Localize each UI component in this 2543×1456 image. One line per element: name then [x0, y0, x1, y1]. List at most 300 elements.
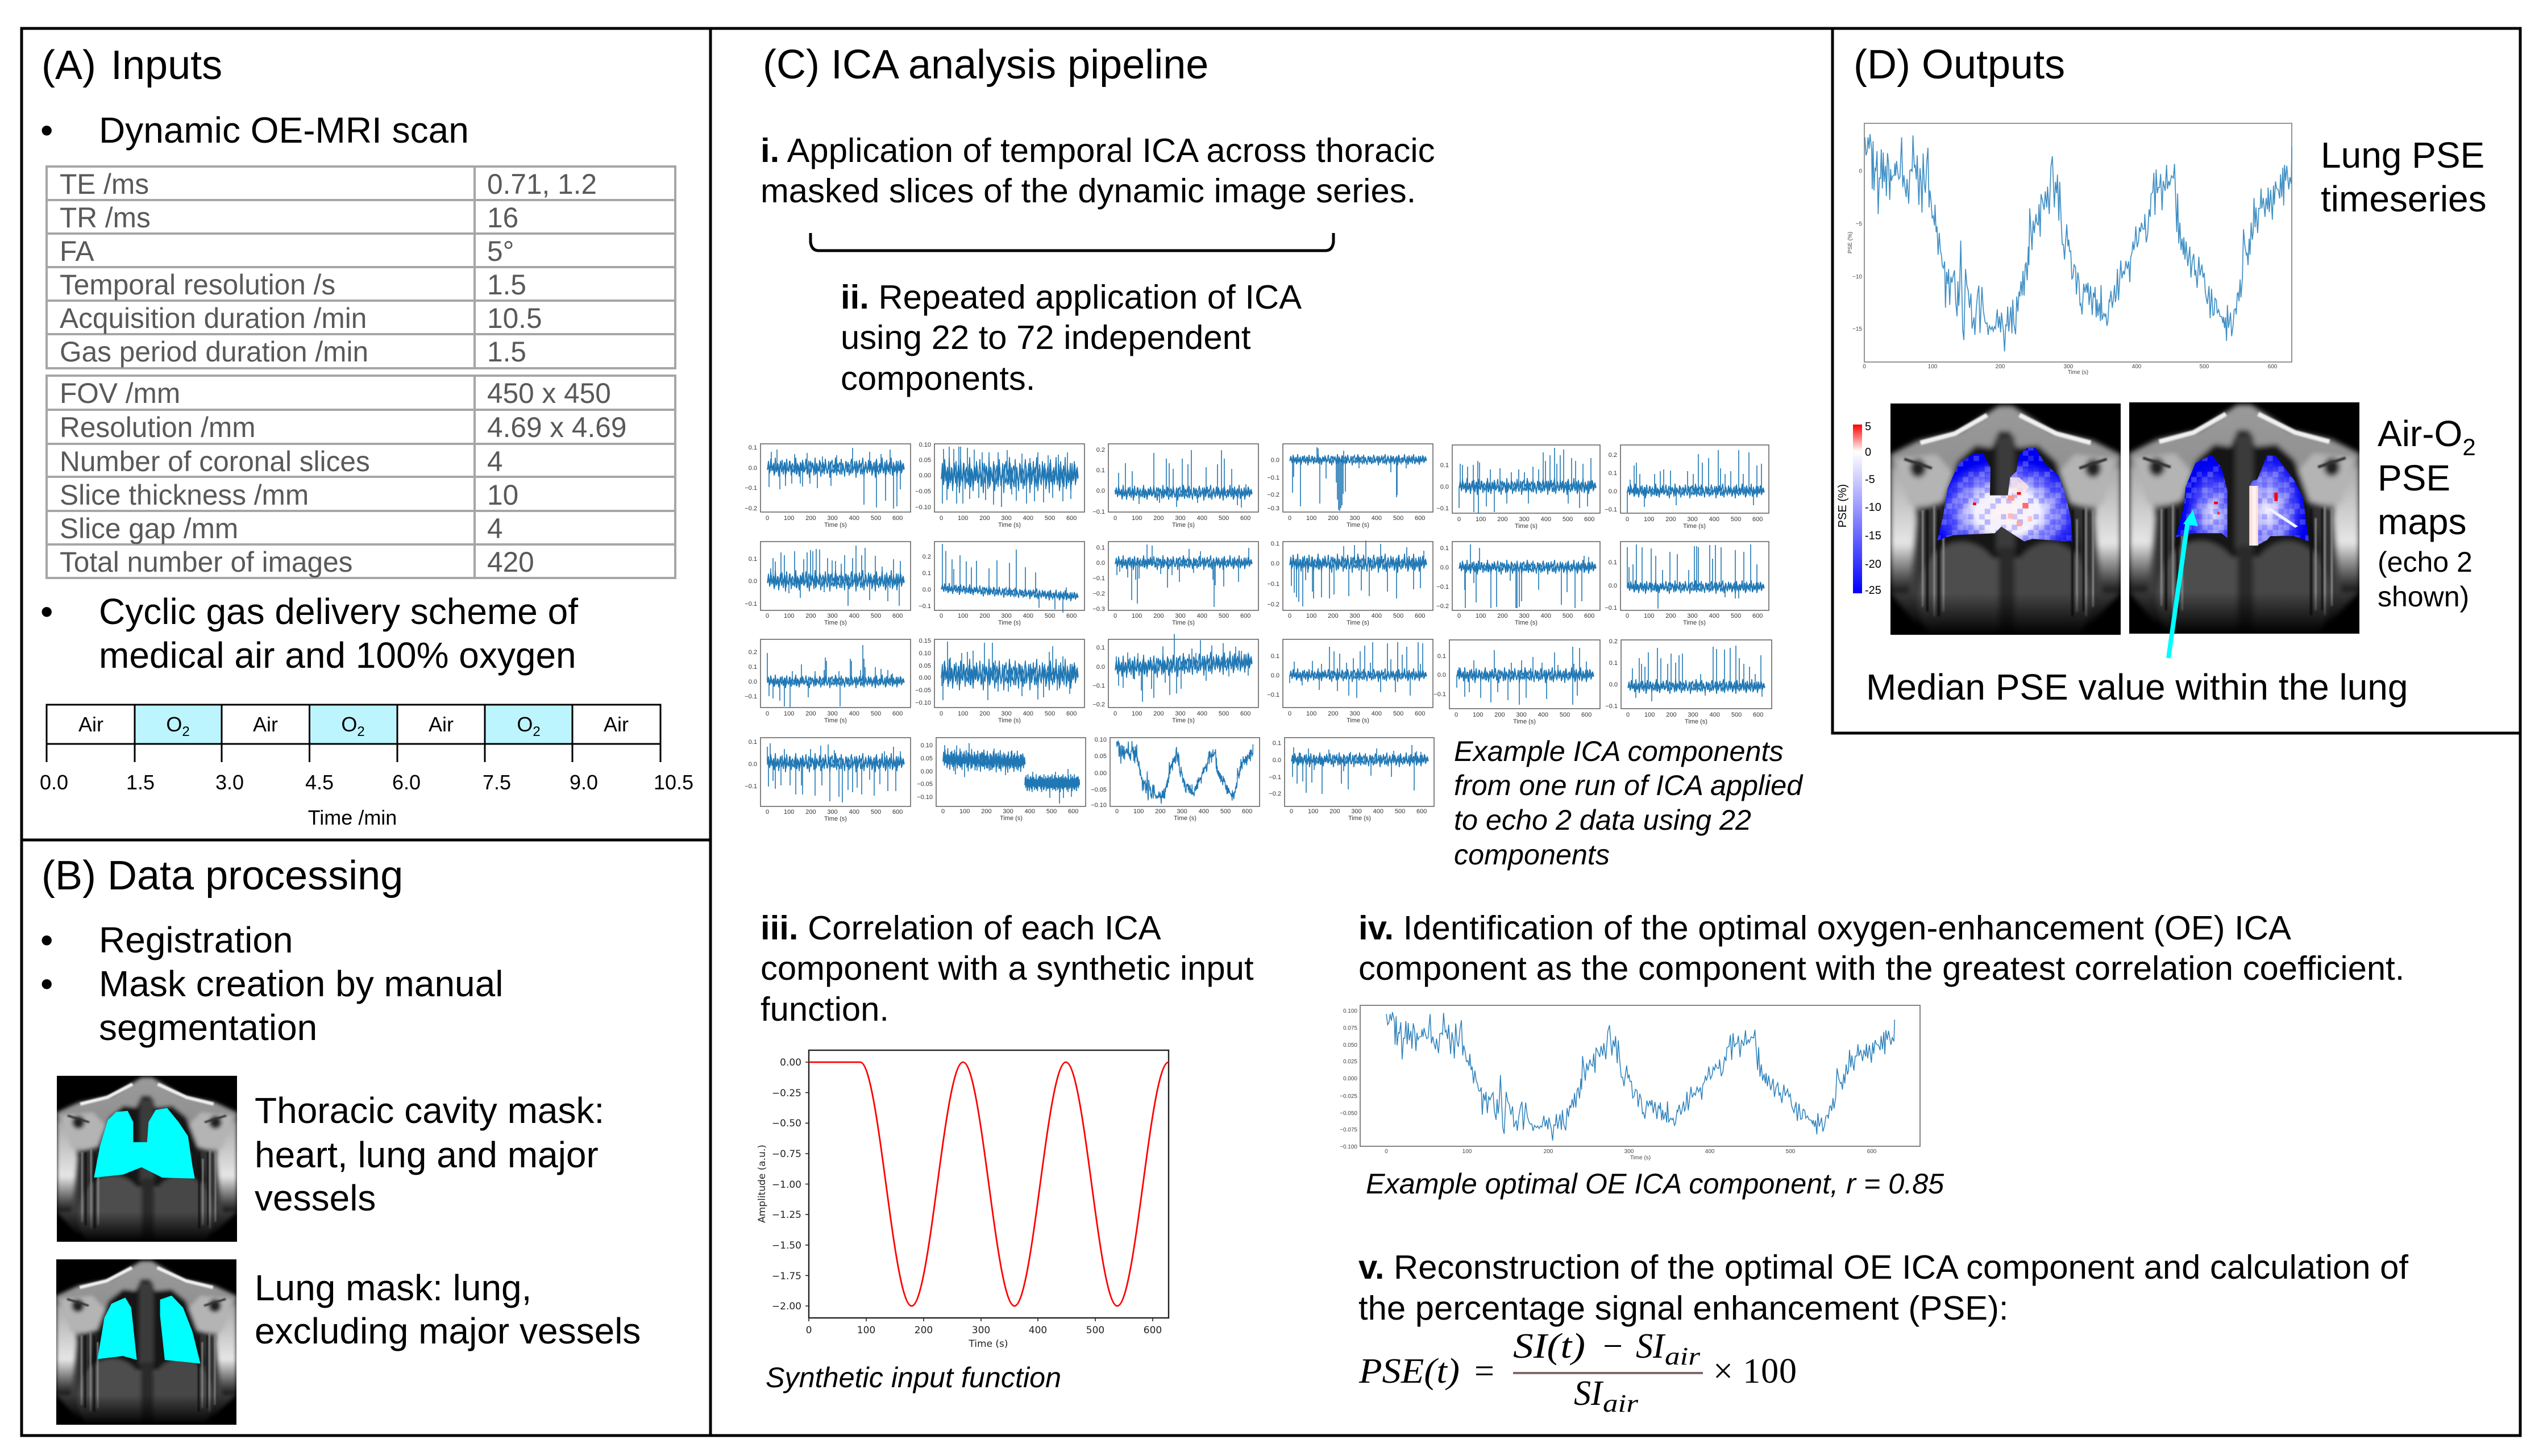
plot r2c5: 100 200 300 400 500 600 — [1476, 613, 1594, 619]
bullet: dynamic scan: Dynamic OE-MRI scan — [99, 110, 469, 151]
plot r4c3: cyclic component: 0.10 — [1095, 737, 1107, 743]
table: acquisition parameters: 10 — [487, 479, 518, 511]
bullets: registration and mask creation: • — [40, 963, 53, 1004]
table: acquisition parameters: TE /ms — [60, 168, 149, 200]
plot r2c5: 0.0 — [1440, 564, 1449, 571]
plot r2c5: 0 — [1457, 613, 1461, 619]
formula: PSE: SI(t) — [1513, 1327, 1585, 1366]
table: acquisition parameters — [47, 167, 675, 578]
plot r1c2: 0 — [940, 515, 943, 522]
table: acquisition parameters: FOV /mm — [60, 377, 180, 409]
plot r3c2: 0 — [940, 710, 943, 717]
chart: optimal OE ICA component: 400 — [1705, 1149, 1715, 1155]
caption: example ICA components: from one run of ICA applied — [1454, 769, 1804, 801]
table: acquisition parameters: Slice thickness /mm — [60, 479, 309, 511]
plot r1c2: 0.10 — [919, 442, 931, 448]
chart: synthetic input function: 300 — [972, 1325, 990, 1336]
bullets: registration and mask creation: Mask creation by manual — [99, 963, 503, 1004]
heading D: (D) Outputs — [1854, 42, 2065, 88]
plot r2c2: 100 200 300 400 500 600 — [958, 613, 1077, 619]
chart: lung PSE timeseries: 300 — [2064, 364, 2074, 370]
colour bar: PSE (%) — [1836, 484, 1849, 527]
plot r2c5: −0.1 — [1436, 584, 1449, 590]
plot r2c3: Time (s) — [1172, 619, 1195, 626]
step v: the percentage signal enhancement (PSE): — [1358, 1289, 2009, 1327]
bullets: registration and mask creation: • — [40, 920, 53, 960]
plot r3c6: 100 200 300 400 500 600 — [1644, 712, 1763, 718]
panel A: inputs — [40, 43, 693, 829]
plot r4c4: 100 200 300 400 500 600 — [1308, 808, 1427, 815]
plot r4c3: cyclic component: −0.10 — [1091, 802, 1107, 809]
bullets: registration and mask creation: segmentation — [99, 1007, 317, 1048]
colour bar: -25 — [1865, 584, 1881, 597]
step iv: component as the component with the greatest correlation coefficient. — [1358, 949, 2404, 987]
plot r3c3: Time (s) — [1172, 717, 1195, 724]
formula: PSE: SI — [1574, 1374, 1604, 1413]
plot r2c1 — [745, 542, 911, 626]
table: acquisition parameters: FA — [60, 235, 94, 267]
plot r1c2 — [915, 442, 1084, 529]
plot r2c1: Time (s) — [824, 619, 847, 626]
plot r1c6: 0.1 — [1609, 470, 1617, 477]
caption: example ICA components: components — [1454, 838, 1610, 871]
chart: lung PSE timeseries: PSE (%) — [1847, 232, 1854, 253]
plot r2c4 — [1267, 540, 1433, 626]
plot r4c4: 0.0 — [1273, 757, 1281, 764]
table: acquisition parameters: 5° — [487, 235, 514, 267]
plot r3c1: Time (s) — [824, 717, 847, 724]
plot r2c4: Time (s) — [1347, 619, 1369, 626]
plot r3c6: −0.1 — [1605, 703, 1618, 710]
plot r3c1: 0.0 — [749, 679, 757, 685]
plot r2c4: 0.1 — [1271, 540, 1279, 547]
chart: optimal OE ICA component: 0.000 — [1343, 1076, 1357, 1082]
plot r3c1: 100 200 300 400 500 600 — [784, 710, 903, 717]
formula: PSE — [1358, 1327, 1797, 1417]
chart: lung PSE timeseries: 500 — [2200, 364, 2209, 370]
chart: synthetic input function: Time (s) — [968, 1338, 1008, 1350]
plot r1c4: 100 200 300 400 500 600 — [1306, 515, 1425, 522]
plot r2c5: 0.1 — [1440, 545, 1449, 552]
chart: optimal OE ICA component: 0.100 — [1343, 1008, 1357, 1014]
plot r2c1: 0.1 — [749, 556, 757, 563]
plot r3c6: 0.2 — [1609, 638, 1618, 645]
plot r2c5: −0.2 — [1436, 603, 1449, 610]
table: acquisition parameters: 4.69 x 4.69 — [487, 411, 626, 443]
plot r2c3: −0.3 — [1092, 606, 1105, 613]
colour bar: 0 — [1865, 446, 1871, 459]
chart: synthetic input function: −1.25 — [772, 1209, 801, 1221]
formula: PSE: × 100 — [1713, 1352, 1797, 1391]
chart: synthetic input function — [757, 1050, 1169, 1350]
table: acquisition parameters: 420 — [487, 546, 534, 578]
chart: optimal OE ICA component: 500 — [1786, 1149, 1796, 1155]
bullet: gas delivery: medical air and 100% oxygen — [99, 635, 576, 676]
plot r1c5: −0.1 — [1436, 505, 1449, 512]
gas delivery timeline: 3.0 — [215, 771, 244, 794]
gas delivery timeline: 10.5 — [654, 771, 693, 794]
gas delivery timeline: 4.5 — [305, 771, 334, 794]
plot r4c3: cyclic component: 100 200 300 400 500 600 — [1133, 808, 1252, 815]
formula: PSE: air — [1603, 1390, 1639, 1417]
plot r1c2: −0.05 — [915, 488, 931, 495]
plot r4c1: 0.1 — [749, 739, 757, 746]
chart: optimal OE ICA component: −0.075 — [1340, 1127, 1357, 1133]
plot r1c4: −0.1 — [1267, 475, 1279, 481]
plot r1c1: −0.1 — [745, 485, 757, 492]
colour bar: 5 — [1865, 421, 1871, 433]
plot r1c6: 100 200 300 400 500 600 — [1644, 516, 1763, 523]
plot r2c4: 100 200 300 400 500 600 — [1306, 613, 1425, 619]
plot r2c6 — [1605, 542, 1769, 626]
plot r4c1: 0.0 — [749, 761, 757, 768]
plot r3c4 — [1267, 639, 1433, 724]
chart: optimal OE ICA component: 200 — [1544, 1149, 1553, 1155]
plot r4c1: Time (s) — [824, 816, 847, 822]
gas delivery timeline: O — [166, 713, 182, 736]
plot r4c4: 0 — [1290, 808, 1293, 815]
colour bar: -10 — [1865, 501, 1881, 514]
gas delivery timeline: Air — [78, 713, 103, 736]
plot r3c3: 0.0 — [1096, 664, 1105, 671]
chart: optimal OE ICA component: −0.050 — [1340, 1110, 1357, 1117]
chart: synthetic input function: −0.75 — [772, 1149, 801, 1160]
plot r4c2: 100 200 300 400 500 600 — [959, 808, 1078, 815]
table: acquisition parameters: 1.5 — [487, 336, 526, 368]
label: air-O2 PSE maps: PSE — [2378, 457, 2450, 498]
chart: optimal OE ICA component: 0.050 — [1343, 1042, 1357, 1049]
plot r2c6: 0.1 — [1609, 559, 1617, 566]
heading A: (A) — [41, 43, 96, 88]
plot r3c1: 0.1 — [749, 664, 757, 671]
chart: lung PSE timeseries: 200 — [1996, 364, 2005, 370]
plot r2c4: 0 — [1288, 613, 1291, 619]
plot r2c3: −0.1 — [1092, 575, 1105, 582]
label: air-O2 PSE maps: maps — [2378, 501, 2467, 542]
table: acquisition parameters: Acquisition duration /min — [60, 302, 367, 334]
plot r2c6: 100 200 300 400 500 600 — [1644, 613, 1763, 619]
plot r1c5: 0.1 — [1440, 462, 1449, 469]
chart: synthetic input function: −1.00 — [772, 1179, 801, 1191]
step ii: using 22 to 72 independent — [841, 318, 1251, 356]
gas delivery timeline: 7.5 — [483, 771, 511, 794]
chart: lung PSE timeseries: Time (s) — [2068, 369, 2088, 376]
plot r2c2: −0.1 — [919, 603, 931, 610]
plot r3c3: −0.1 — [1092, 683, 1105, 689]
plot r4c1: −0.1 — [745, 783, 757, 790]
plot r1c5: 0 — [1457, 516, 1461, 523]
plot r2c5 — [1436, 542, 1600, 626]
plot r4c2: Time (s) — [1000, 815, 1023, 822]
plot r3c1 — [745, 639, 911, 724]
plot r1c2: 100 200 300 400 500 600 — [958, 515, 1077, 522]
chart: synthetic input function: −0.25 — [772, 1088, 801, 1099]
plot r2c1: −0.1 — [745, 601, 757, 608]
plot r3c2: 0.15 — [919, 638, 931, 644]
gas delivery timeline: 1.5 — [126, 771, 155, 794]
plot r3c1: −0.1 — [745, 693, 757, 700]
label: air-O2 PSE maps: shown) — [2378, 581, 2469, 613]
plot r1c4: Time (s) — [1347, 522, 1369, 529]
chart: synthetic input function: 600 — [1144, 1325, 1162, 1336]
plot r3c4: 100 200 300 400 500 600 — [1306, 710, 1425, 717]
plot r3c4: Time (s) — [1347, 717, 1369, 724]
plot r2c2: Time (s) — [998, 619, 1021, 626]
plot r2c1: 100 200 300 400 500 600 — [784, 613, 903, 619]
gas delivery timeline: O — [517, 713, 533, 736]
chart: synthetic input function: −0.50 — [772, 1118, 801, 1129]
plot r4c2: −0.10 — [917, 794, 933, 801]
gas delivery timeline: 2 — [533, 724, 541, 739]
gas delivery timeline: O — [341, 713, 357, 736]
table: acquisition parameters: 1.5 — [487, 269, 526, 301]
plot r4c4: 0.1 — [1273, 740, 1281, 747]
chart: lung PSE timeseries: 100 — [1928, 364, 1938, 370]
plot r4c3: cyclic component — [1091, 737, 1260, 822]
plot r1c1 — [745, 444, 911, 529]
plot r1c6: 0 — [1626, 516, 1629, 523]
plot r3c1: 0.2 — [749, 649, 757, 656]
chart: optimal OE ICA component: 100 — [1462, 1149, 1472, 1155]
chart: synthetic input function: 0.00 — [780, 1057, 801, 1068]
PSE map: thoracic cavity — [1890, 403, 2121, 654]
caption: example ICA components: to echo 2 data using 22 — [1454, 804, 1751, 836]
plot r2c2: 0.0 — [923, 586, 931, 593]
chart: lung PSE timeseries — [1847, 123, 2292, 376]
table: acquisition parameters: Gas period duration /min — [60, 336, 368, 368]
plot r2c3: −0.2 — [1092, 590, 1105, 597]
chart: lung PSE timeseries: 0 — [1863, 364, 1866, 370]
plot r3c2: −0.05 — [915, 687, 931, 694]
plot r4c3: cyclic component: −0.05 — [1091, 787, 1107, 793]
plot r3c5 — [1433, 640, 1600, 725]
gas delivery timeline: 6.0 — [392, 771, 421, 794]
plot r1c3: 0 — [1113, 515, 1117, 522]
plot r2c3: 0.0 — [1096, 560, 1105, 567]
plot r3c4: −0.1 — [1267, 692, 1279, 698]
plot r1c6: −0.1 — [1605, 506, 1617, 513]
plot r1c4: 0 — [1288, 515, 1291, 522]
chart: optimal OE ICA component: −0.025 — [1340, 1093, 1357, 1100]
colour bar: -5 — [1865, 473, 1875, 486]
plot r3c2 — [915, 638, 1084, 724]
plot r1c4: −0.2 — [1267, 492, 1279, 498]
plot r1c1: Time (s) — [824, 522, 847, 529]
gas delivery timeline — [40, 705, 693, 829]
plot r4c2: −0.05 — [917, 781, 933, 788]
panel D: outputs — [1836, 42, 2487, 708]
chart: optimal OE ICA component — [1340, 1005, 1920, 1161]
plot r2c6: 0 — [1626, 613, 1629, 619]
chart: synthetic input function: 200 — [915, 1325, 933, 1336]
plot r2c2: 0.2 — [923, 554, 931, 560]
chart: synthetic input function: −1.50 — [772, 1240, 801, 1251]
step iii: iii. Correlation of each ICA — [761, 909, 1161, 947]
chart: synthetic input function: −2.00 — [772, 1301, 801, 1312]
plot r4c4: −0.2 — [1269, 791, 1281, 797]
caption: thoracic cavity mask: Thoracic cavity mask: — [255, 1090, 604, 1131]
plot r1c1: 100 200 300 400 500 600 — [784, 515, 903, 522]
plot r3c2: 0.00 — [919, 675, 931, 681]
plot r3c3 — [1092, 630, 1258, 724]
ICA component grid — [745, 442, 1772, 822]
plot r3c4: 0.1 — [1271, 653, 1279, 660]
step iv: iv. Identification of the optimal oxygen-enhancement (OE) ICA — [1358, 909, 2291, 947]
plot r4c1 — [745, 738, 911, 822]
table: acquisition parameters: 4 — [487, 513, 503, 544]
heading C: (C) ICA analysis pipeline — [763, 42, 1208, 88]
plot r3c5: 0.0 — [1437, 672, 1446, 679]
colour bar: -20 — [1865, 558, 1881, 571]
plot r3c1: 0 — [766, 710, 769, 717]
plot r3c6 — [1605, 638, 1772, 725]
plot r1c1: 0 — [766, 515, 769, 522]
step i: masked slices of the dynamic image series. — [761, 172, 1416, 210]
colour bar: -15 — [1865, 530, 1881, 542]
chart: synthetic input function: 500 — [1086, 1325, 1104, 1336]
plot r1c5: 100 200 300 400 500 600 — [1476, 516, 1594, 523]
plot r1c4 — [1267, 444, 1433, 529]
bullet: gas delivery: Cyclic gas delivery scheme of — [99, 591, 578, 632]
label: air-O2 PSE maps: (echo 2 — [2378, 546, 2473, 578]
plot r4c4: −0.1 — [1269, 774, 1281, 781]
plot r3c6: Time (s) — [1685, 718, 1707, 725]
plot r2c2: 0.1 — [923, 570, 931, 577]
gas delivery timeline: Air — [429, 713, 454, 736]
panel C: ICA analysis pipeline — [745, 42, 2408, 1417]
gas delivery timeline: 0.0 — [40, 771, 68, 794]
plot r2c2: 0 — [940, 613, 943, 619]
bullet: dynamic scan: • — [40, 110, 53, 151]
gas delivery timeline: 9.0 — [570, 771, 598, 794]
plot r2c3 — [1092, 542, 1258, 626]
chart: optimal OE ICA component: 0.025 — [1343, 1059, 1357, 1065]
plot r3c6: 0.0 — [1609, 681, 1618, 688]
plot r2c1: 0.0 — [749, 578, 757, 585]
plot r2c5: Time (s) — [1515, 619, 1538, 626]
chart: lung PSE timeseries: 600 — [2268, 364, 2278, 370]
plot r2c2 — [919, 542, 1084, 626]
formula: PSE: air — [1665, 1342, 1701, 1370]
plot r1c1: 0.1 — [749, 444, 757, 451]
plot r4c2: 0.00 — [921, 768, 933, 775]
label: lung PSE timeseries: timeseries — [2321, 178, 2487, 219]
plot r3c3: 0 — [1113, 710, 1117, 717]
plot r3c3: 0.1 — [1096, 644, 1105, 651]
plot r1c6: 0.2 — [1609, 452, 1617, 459]
formula: PSE: PSE(t) — [1358, 1352, 1460, 1391]
plot r2c6: 0.0 — [1609, 583, 1617, 589]
table: acquisition parameters: 450 x 450 — [487, 377, 611, 409]
formula: PSE: SI — [1636, 1327, 1666, 1366]
caption: thoracic cavity mask: heart, lung and major — [255, 1134, 599, 1175]
panel B: data processing — [40, 853, 641, 1438]
chart: lung PSE timeseries: −5 — [1856, 221, 1862, 227]
step iii: function. — [761, 990, 889, 1028]
PSE map: lung — [2129, 402, 2359, 652]
plot r4c4: Time (s) — [1348, 815, 1371, 822]
plot r3c5: 0.1 — [1437, 653, 1446, 660]
step i: i. Application of temporal ICA across thoracic — [761, 131, 1435, 169]
plot r3c2: 0.05 — [919, 663, 931, 669]
chart: synthetic input function: 400 — [1029, 1325, 1047, 1336]
plot r3c5: 0 — [1455, 712, 1458, 718]
plot r1c3: 100 200 300 400 500 600 — [1132, 515, 1250, 522]
image: thoracic cavity mask — [57, 1076, 237, 1255]
plot r1c5 — [1436, 445, 1600, 530]
plot r3c2: 0.10 — [919, 650, 931, 657]
plot r1c2: 0.05 — [919, 457, 931, 464]
table: acquisition parameters: 4 — [487, 446, 503, 477]
chart: synthetic input function: 0 — [806, 1325, 812, 1336]
caption: synthetic input function: Synthetic input function — [766, 1361, 1061, 1393]
plot r2c6: −0.1 — [1605, 605, 1617, 611]
arrow: median PSE — [2168, 510, 2198, 658]
plot r4c2: 0.10 — [921, 742, 933, 749]
plot r1c6 — [1605, 445, 1769, 530]
plot r4c2: 0.05 — [921, 755, 933, 762]
chart: optimal OE ICA component: 0 — [1385, 1149, 1388, 1155]
caption: lung mask: Lung mask: lung, — [255, 1267, 531, 1308]
chart: lung PSE timeseries: 400 — [2132, 364, 2142, 370]
plot r3c3: 100 200 300 400 500 600 — [1132, 710, 1250, 717]
plot r1c2: 0.00 — [919, 472, 931, 479]
step ii: components. — [841, 359, 1035, 397]
plot r4c1: 0 — [766, 809, 769, 816]
caption: optimal component: Example optimal OE ICA component, r = 0.85 — [1366, 1167, 1944, 1200]
plot r1c5: 0.0 — [1440, 484, 1449, 490]
chart: synthetic input function: 100 — [857, 1325, 875, 1336]
table: acquisition parameters: 10.5 — [487, 302, 542, 334]
plot r4c2 — [917, 738, 1086, 822]
plot r4c2: 0 — [941, 808, 945, 815]
table: acquisition parameters: Resolution /mm — [60, 411, 256, 443]
formula: PSE: = — [1474, 1352, 1494, 1391]
plot r4c1: 100 200 300 400 500 600 — [784, 809, 903, 816]
plot r1c1: −0.2 — [745, 505, 757, 512]
plot r2c4: −0.1 — [1267, 581, 1279, 588]
table: acquisition parameters: Total number of images — [60, 546, 352, 578]
label: air-O2 PSE maps: 2 — [2462, 434, 2476, 460]
chart: synthetic input function: −1.75 — [772, 1271, 801, 1282]
gas delivery timeline: Air — [253, 713, 278, 736]
gas delivery timeline: Air — [604, 713, 629, 736]
plot r1c1: 0.0 — [749, 465, 757, 472]
plot r3c5: −0.1 — [1433, 691, 1446, 698]
plot r4c3: cyclic component: Time (s) — [1174, 815, 1196, 822]
plot r2c6: Time (s) — [1683, 619, 1706, 626]
plot r4c3: cyclic component: 0.05 — [1095, 753, 1107, 760]
plot r1c5: Time (s) — [1515, 523, 1538, 530]
plot r1c3: 0.0 — [1096, 488, 1105, 494]
caption: thoracic cavity mask: vessels — [255, 1178, 376, 1218]
caption: lung mask: excluding major vessels — [255, 1311, 641, 1351]
plot r1c4: 0.0 — [1271, 457, 1279, 464]
image: lung mask — [56, 1259, 236, 1438]
chart: lung PSE timeseries: −15 — [1852, 326, 1862, 332]
plot r3c2: 100 200 300 400 500 600 — [958, 710, 1077, 717]
table: acquisition parameters: Number of coronal slices — [60, 446, 370, 477]
plot r1c6: Time (s) — [1683, 523, 1706, 530]
plot r1c3: Time (s) — [1172, 522, 1195, 529]
step ii: ii. Repeated application of ICA — [841, 278, 1302, 316]
chart: optimal OE ICA component: −0.100 — [1340, 1144, 1357, 1150]
plot r1c4: −0.3 — [1267, 505, 1279, 512]
bracket — [811, 233, 1333, 251]
plot r2c4: −0.2 — [1267, 601, 1279, 608]
plot r2c3: 0.1 — [1096, 544, 1105, 551]
plot r3c2: Time (s) — [998, 717, 1021, 724]
